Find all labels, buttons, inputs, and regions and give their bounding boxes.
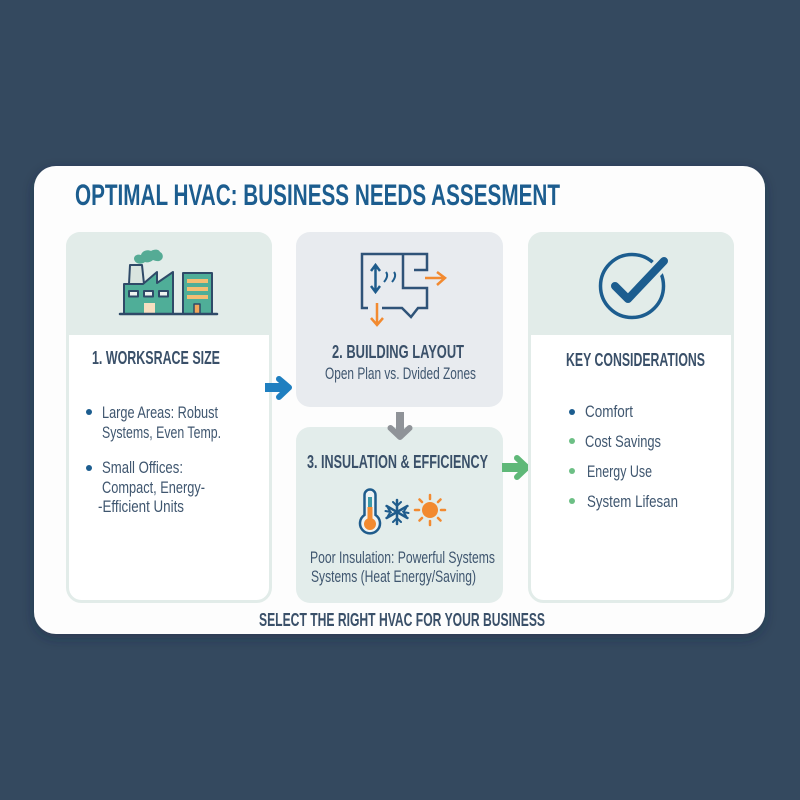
bullet list: considerations: Cost Savings — [585, 432, 661, 451]
bullet list: workspace size: Compact, Energy- — [102, 478, 205, 497]
panel: building layout — [296, 232, 503, 407]
footer text: SELECT THE RIGHT HVAC FOR YOUR BUSINESS — [259, 610, 545, 630]
bullet list: considerations: Energy Use — [587, 462, 652, 481]
text: open plan: Open Plan vs. Dvided Zones — [325, 364, 476, 383]
text: insulation description: Systems (Heat Energy/Saving) — [311, 567, 476, 586]
text: insulation description: Poor Insulation: Powerful Systems — [310, 548, 495, 567]
icon: thermometer — [360, 490, 380, 533]
heading: workspace size: 1. WORKSRACE SIZE — [92, 348, 220, 368]
bullet list: considerations: Comfort — [585, 402, 633, 421]
text: insulation description — [310, 548, 495, 586]
arrow: green right — [502, 458, 527, 477]
icon: check mark — [600, 254, 664, 318]
arrow: blue right — [265, 379, 289, 397]
bullet list: workspace size: Systems, Even Temp. — [102, 423, 221, 442]
icon: factory and office building — [120, 250, 217, 314]
heading: key considerations: KEY CONSIDERATIONS — [566, 350, 705, 370]
icon: snowflake — [386, 500, 408, 524]
heading: building layout: 2. BUILDING LAYOUT — [332, 342, 464, 362]
arrow: gray down — [390, 412, 410, 437]
bullet list: workspace size — [86, 403, 221, 516]
panel: insulation and efficiency — [296, 427, 503, 603]
bullet list: considerations — [569, 402, 678, 511]
bullet list: workspace size: Small Offices: — [102, 458, 183, 477]
icon: sun — [415, 495, 445, 525]
panel: workspace size — [66, 232, 272, 602]
main card — [34, 166, 765, 634]
bullet list: considerations: System Lifesan — [587, 492, 678, 511]
panel: key considerations — [528, 232, 734, 602]
heading: insulation: 3. INSULATION & EFFICIENCY — [307, 452, 488, 472]
bullet list: workspace size: Large Areas: Robust — [102, 403, 218, 422]
icon: floor plan — [362, 254, 445, 325]
bullet list: workspace size: -Efficient Units — [98, 497, 184, 516]
title: OPTIMAL HVAC: BUSINESS NEEDS ASSESMENT — [75, 179, 560, 212]
